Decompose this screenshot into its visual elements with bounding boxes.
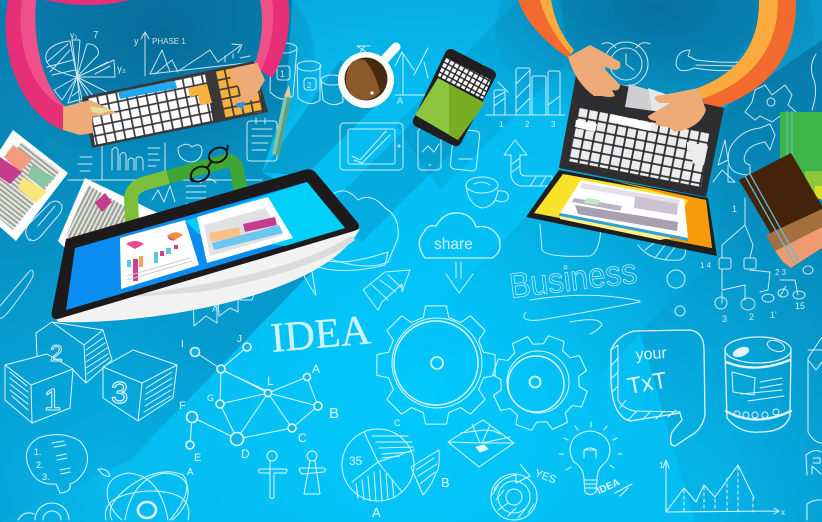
object: glasses	[188, 145, 230, 184]
sketch: fan pie chart: γ₂	[117, 64, 126, 75]
tablet screen	[66, 182, 345, 310]
sketches: lower doodles	[5, 306, 822, 520]
sketch: coffee cup	[466, 177, 508, 208]
sketch: fan pie chart	[46, 30, 126, 103]
sketch: male figure	[258, 451, 287, 498]
sketch: network diagram: F	[179, 400, 186, 412]
sketch: small gear	[479, 322, 601, 444]
sketch: bar chart: 2	[525, 120, 530, 129]
object: pencil	[272, 85, 291, 156]
sketch: pie chart: C	[394, 418, 401, 428]
sketch: paper clips	[0, 201, 62, 318]
sketch: share cloud: share	[434, 236, 473, 253]
sketch: cube 3	[103, 350, 177, 421]
laptop base	[559, 75, 724, 197]
sketch: phase line chart: PHASE 1	[152, 37, 186, 46]
hand: right	[230, 63, 265, 104]
sketch: network diagram: L	[267, 374, 274, 388]
sketch: fan pie chart: γ₁	[70, 30, 78, 40]
sketch: phones	[418, 128, 480, 171]
object: brown book	[739, 153, 822, 268]
sketch: your text speech bubble: your	[635, 345, 668, 364]
sketch: wrench	[676, 50, 738, 71]
object: left paper	[0, 130, 68, 241]
sketch: bar chart: 3	[551, 120, 556, 129]
tablet bezel	[52, 169, 359, 319]
sketch: network diagram: I	[181, 339, 184, 350]
sketch: network diagram: B	[329, 405, 339, 422]
sketch: org chart: 1'	[770, 310, 777, 320]
sketch: idea heading: IDEA	[269, 307, 373, 362]
sketch: letter R	[806, 451, 821, 520]
sketch: bar chart	[480, 63, 565, 129]
sketch: list speech bubble: 3.	[42, 472, 50, 482]
chart panel	[120, 220, 199, 289]
sketch: your text speech bubble	[611, 330, 705, 446]
sketch: cans	[270, 43, 343, 105]
sketch: cloud with ribbon	[298, 191, 398, 295]
sketch: fan pie chart: 7	[93, 30, 99, 41]
laptop lid screen	[526, 170, 717, 256]
sketches: upper left business doodles	[0, 30, 428, 326]
sketch: org chart	[667, 198, 813, 324]
sketch: network diagram: A	[312, 362, 320, 376]
sketch: cube 2	[36, 322, 112, 383]
sketch: arrow	[363, 270, 410, 310]
sketch: your text speech bubble: TxT	[625, 366, 669, 399]
sketch: pie chart: 35	[349, 454, 363, 468]
sketch: atom: A	[187, 467, 194, 478]
sketch: large gear	[377, 306, 495, 424]
sketch: phase line chart: y	[134, 36, 139, 46]
sketch: cube 1	[5, 354, 73, 423]
sketch: share cloud	[419, 213, 500, 258]
sketch: tin can	[725, 337, 791, 432]
object: orange arms	[518, 0, 796, 111]
sketch: pie wedge: B	[441, 475, 450, 490]
sketch: bookmarks: A	[212, 304, 218, 314]
sketch: org chart: 15	[795, 301, 805, 311]
sketch: line chart	[659, 460, 785, 517]
sketch: cube 3: 3	[111, 375, 128, 410]
sketches: upper right doodles	[418, 42, 816, 334]
sketch: list speech bubble	[26, 435, 88, 493]
object: laptop	[526, 45, 724, 256]
sketch: bar chart: 1	[499, 120, 504, 129]
hand: left	[63, 100, 117, 135]
sketch: line chart: x	[781, 508, 785, 517]
object: second paper	[58, 178, 158, 248]
hand: laptop left	[568, 45, 620, 97]
sketch: spiral arrow: YES	[533, 468, 558, 486]
sketch: notepad	[247, 118, 277, 161]
object: coffee cup	[338, 47, 396, 108]
sketch: triangle charts	[357, 46, 428, 106]
sketch: bookmarks	[193, 280, 258, 326]
sketch: org chart: 1 4	[700, 261, 712, 270]
sketch: up arrow	[504, 140, 552, 186]
sketch: org chart: 3	[722, 314, 727, 324]
sketch: pie wedge	[411, 450, 450, 495]
sketch: business word	[507, 252, 640, 334]
sketch: business word: Business	[507, 252, 639, 306]
sketch: phase line chart	[134, 32, 255, 76]
sketch: female figure	[299, 451, 326, 494]
sketch: open box	[448, 420, 514, 467]
object: pink arms	[6, 0, 289, 131]
sketch: cube 2: 2	[50, 340, 63, 366]
sketch: cans: 1	[280, 69, 285, 79]
sketch: org chart: 1	[732, 204, 737, 214]
sketch: desk doodles	[68, 143, 262, 204]
sketch: wavy line	[811, 54, 816, 110]
sketch: pie chart	[342, 418, 414, 520]
object: green book	[780, 111, 822, 200]
sketch: line chart: 1	[659, 461, 664, 470]
sketch: org chart: 2	[749, 312, 754, 322]
object: green tablet handle	[131, 161, 241, 222]
sketch: corner target	[18, 503, 69, 520]
hand: laptop right	[648, 88, 706, 132]
object: tablet	[52, 169, 360, 322]
sketch: network diagram: J	[237, 334, 242, 345]
sketch: alarm clock	[602, 42, 650, 86]
sketch: network diagram: G	[207, 393, 214, 403]
object: smartphone	[413, 49, 496, 146]
sketch: basket and cup under laptop	[540, 224, 686, 260]
tablet base	[52, 229, 360, 322]
sketch: down arrow	[446, 262, 473, 293]
sketch: cans: 2	[307, 81, 312, 90]
sketch: gears and arrows cluster	[713, 85, 796, 182]
sketch: list speech bubble: 2.	[36, 460, 44, 470]
sketch: org chart: 2 3	[775, 268, 787, 277]
sketch: network diagram	[179, 334, 339, 464]
sketch: triangle charts: A	[397, 96, 403, 106]
sketch: spiral arrow	[491, 464, 558, 520]
sketch: network diagram: C	[298, 431, 307, 445]
sketch: pie chart: A	[372, 505, 381, 520]
sketch: atom	[98, 467, 194, 520]
sketch: cube 1: 1	[44, 382, 61, 417]
sketch: pencil right	[808, 337, 822, 443]
sketch: list speech bubble: 1.	[34, 447, 42, 457]
sketch: network diagram: E	[194, 452, 201, 464]
sketch: tablet with check	[340, 123, 403, 170]
sketch: network diagram: D	[241, 447, 250, 461]
sketch: bar chart: A	[480, 63, 486, 72]
sketch: light bulb	[559, 422, 632, 497]
sketch: light bulb: IDEA	[595, 477, 622, 497]
object: keyboard	[63, 61, 268, 148]
trackpad	[625, 84, 674, 113]
report panel	[197, 197, 293, 263]
